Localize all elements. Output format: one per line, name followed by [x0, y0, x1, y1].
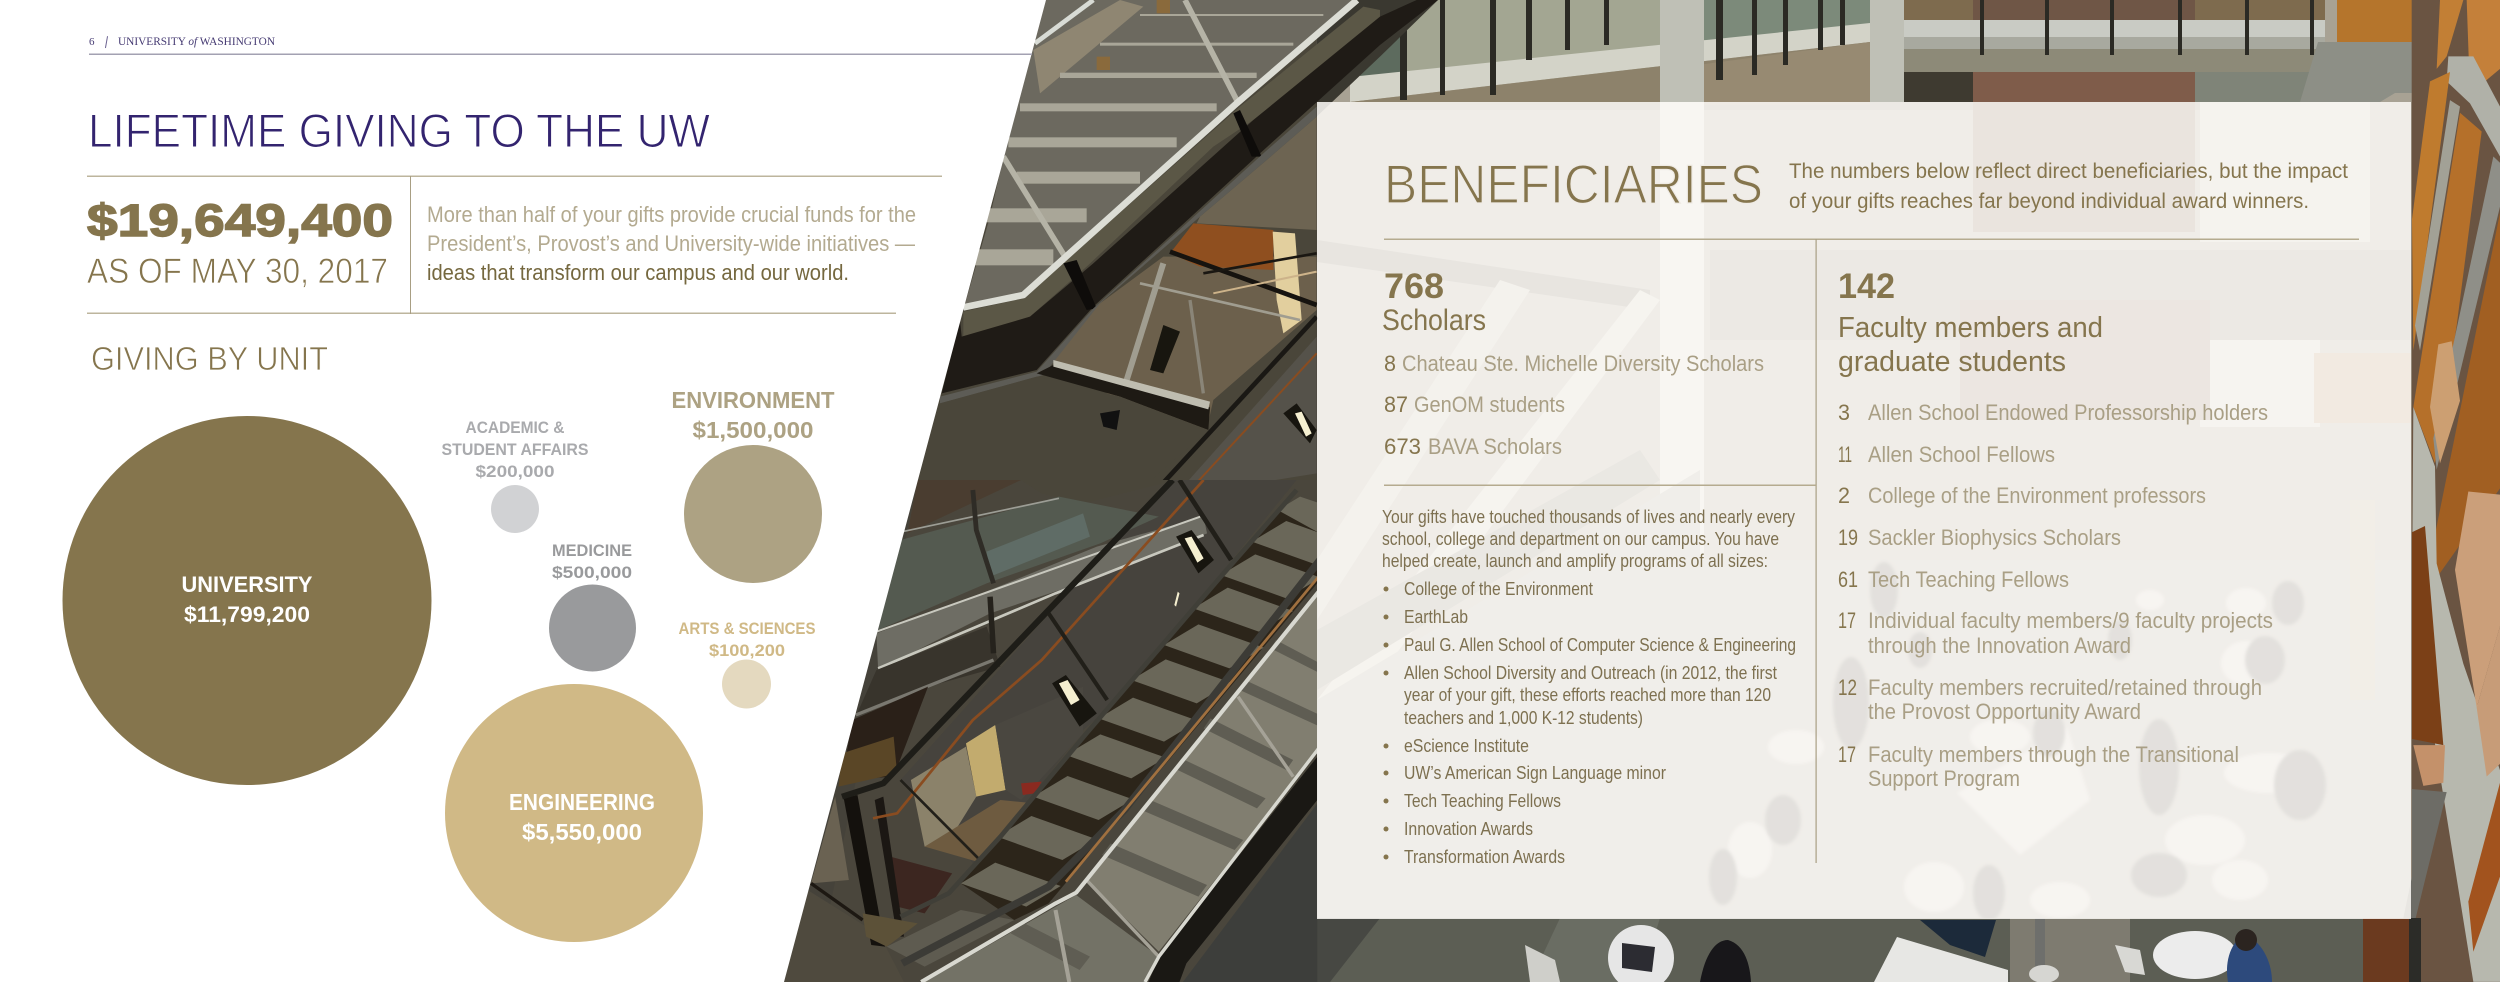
programs bullet list: UW’s American Sign Language minor	[1404, 763, 1666, 783]
faculty breakdown list: Support Program	[1868, 766, 2020, 791]
programs paragraph: school, college and department on our campus. You have	[1382, 529, 1779, 549]
faculty breakdown list: the Provost Opportunity Award	[1868, 699, 2141, 724]
photo: cafe tables beneath the panel	[1728, 588, 2314, 918]
bubble: university	[62, 416, 432, 785]
photo: top balustrade posts	[1400, 0, 2314, 100]
programs bullet list: eScience Institute	[1404, 736, 1529, 756]
bubble: medicine	[549, 541, 636, 672]
programs bullet list: year of your gift, these efforts reached more than 120	[1404, 685, 1771, 705]
bubble: arts and sciences: $100,200	[709, 641, 785, 660]
scholars column	[1382, 267, 1796, 867]
programs bullet list: Transformation Awards	[1404, 847, 1565, 867]
heading: giving by unit: GIVING BY UNIT	[91, 340, 328, 377]
faculty breakdown list: Individual faculty members/9 faculty projects	[1868, 608, 2273, 633]
faculty breakdown list: Allen School Fellows	[1868, 442, 2055, 467]
scholars breakdown list: 87	[1384, 392, 1408, 417]
photo: cafe figures beneath the panel	[1709, 562, 2326, 921]
bubble: academic and student affairs: STUDENT AFFAIRS	[442, 440, 588, 459]
title: LIFETIME GIVING TO THE UW	[88, 104, 711, 157]
stat: 142 faculty: Faculty members and	[1838, 312, 2103, 344]
faculty breakdown list: 61	[1838, 567, 1858, 592]
stat: 768 scholars	[1382, 267, 1486, 337]
faculty breakdown list: 2	[1838, 483, 1850, 508]
scholars breakdown list	[1384, 351, 1764, 459]
stat: 768 scholars: 768	[1384, 267, 1444, 306]
stat: 768 scholars: Scholars	[1382, 304, 1486, 337]
stat: 142 faculty	[1838, 267, 2103, 378]
bubble chart: giving by unit	[62, 387, 834, 942]
bubble: university: UNIVERSITY	[182, 572, 313, 597]
intro text: The numbers below reflect direct beneficiaries, but the impact	[1789, 159, 2348, 183]
panel: beneficiaries	[1317, 102, 2411, 919]
bubble: engineering: ENGINEERING	[509, 789, 655, 815]
faculty breakdown list: Sackler Biophysics Scholars	[1868, 525, 2121, 550]
bubble: environment	[672, 387, 834, 583]
intro text: of your gifts reaches far beyond individual award winners.	[1789, 189, 2309, 213]
faculty breakdown list: Tech Teaching Fellows	[1868, 567, 2069, 592]
page header: 6	[89, 36, 95, 48]
faculty breakdown list: 17	[1838, 608, 1856, 633]
faculty breakdown list: Faculty members through the Transitional	[1868, 742, 2239, 767]
bubble: academic and student affairs	[442, 418, 588, 533]
faculty breakdown list: 19	[1838, 525, 1858, 550]
programs bullet list: EarthLab	[1404, 607, 1468, 627]
bubble: engineering	[445, 684, 703, 942]
bubble: medicine: MEDICINE	[552, 541, 632, 560]
as-of date: AS OF MAY 30, 2017	[87, 252, 388, 291]
bubble: arts and sciences	[678, 619, 816, 708]
scholars breakdown list: GenOM students	[1414, 392, 1565, 417]
faculty breakdown list: 3	[1838, 400, 1850, 425]
description: President’s, Provost’s and University-wide initiatives —	[427, 231, 915, 256]
bubble: environment: $1,500,000	[692, 417, 814, 443]
programs bullet list: teachers and 1,000 K-12 students)	[1404, 708, 1643, 728]
scholars breakdown list: 673	[1384, 434, 1421, 459]
faculty breakdown list: through the Innovation Award	[1868, 633, 2131, 658]
bubble: medicine: $500,000	[552, 563, 632, 582]
programs bullet list: Paul G. Allen School of Computer Science & Engineering	[1404, 635, 1796, 655]
faculty breakdown list: Allen School Endowed Professorship holders	[1868, 400, 2268, 425]
photo: atrium beyond the panel	[1300, 0, 2417, 921]
scholars breakdown list: Chateau Ste. Michelle Diversity Scholars	[1402, 351, 1764, 376]
photo: wood and concrete right edge	[2380, 0, 2500, 982]
intro text	[1789, 159, 2348, 213]
faculty breakdown list: 17	[1838, 742, 1856, 767]
description: ideas that transform our campus and our world.	[427, 260, 849, 285]
faculty breakdown list: Faculty members recruited/retained through	[1868, 675, 2262, 700]
stat: 142 faculty: graduate students	[1838, 346, 2066, 378]
headline stat block	[87, 176, 942, 314]
programs bullet list: Tech Teaching Fellows	[1404, 791, 1561, 811]
programs paragraph: Your gifts have touched thousands of lives and nearly every	[1382, 507, 1795, 527]
programs bullet list: College of the Environment	[1404, 579, 1593, 599]
description: More than half of your gifts provide crucial funds for the	[427, 202, 916, 227]
faculty breakdown list: 12	[1838, 675, 1857, 700]
photo: upper mesh stair flight and beam	[913, 0, 1438, 490]
programs bullet list: Innovation Awards	[1404, 819, 1533, 839]
bubble: academic and student affairs: $200,000	[476, 462, 554, 481]
stat: 142 faculty: 142	[1838, 267, 1895, 306]
white left page background	[0, 0, 1046, 982]
total amount: $19,649,400	[87, 195, 393, 246]
heading: beneficiaries: BENEFICIARIES	[1384, 153, 1763, 215]
bubble: arts and sciences: ARTS & SCIENCES	[678, 619, 816, 638]
bubble: university: $11,799,200	[184, 602, 310, 627]
photo: cafe floor strip	[1317, 918, 2421, 982]
bubble: academic and student affairs: ACADEMIC &	[466, 418, 564, 437]
programs paragraph	[1382, 507, 1795, 571]
page header	[89, 34, 1032, 55]
programs bullet list: Allen School Diversity and Outreach (in 2012, the first	[1404, 663, 1777, 683]
programs bullet list	[1384, 579, 1796, 867]
bubble: environment: ENVIRONMENT	[672, 387, 834, 413]
faculty breakdown list: College of the Environment professors	[1868, 483, 2206, 508]
bubble: engineering: $5,550,000	[522, 819, 642, 845]
faculty column	[1838, 267, 2273, 791]
photo: lower staircase with treads, rails and room below	[780, 480, 1352, 982]
description	[427, 202, 916, 285]
photo: wood block and concrete upper right	[2300, 0, 2443, 102]
background photo: atrium with staircase	[700, 0, 2500, 982]
programs paragraph: helped create, launch and amplify programs of all sizes:	[1382, 551, 1768, 571]
faculty breakdown list	[1838, 400, 2273, 791]
scholars breakdown list: 8	[1384, 351, 1396, 376]
scholars breakdown list: BAVA Scholars	[1428, 434, 1562, 459]
page header: UNIVERSITY of WASHINGTON	[118, 34, 275, 48]
faculty breakdown list: 11	[1838, 442, 1852, 467]
